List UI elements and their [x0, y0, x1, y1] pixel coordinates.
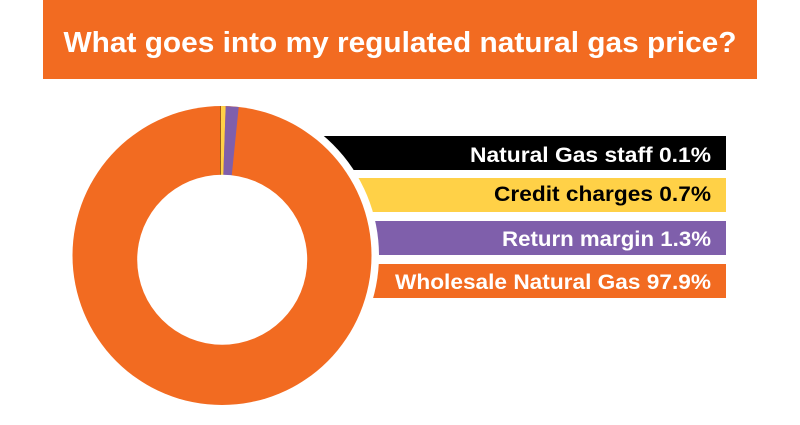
bar: natural gas staff [300, 136, 726, 170]
title banner [43, 0, 757, 79]
bar: natural gas staff: Natural Gas staff 0.1% [470, 143, 711, 167]
title: What goes into my regulated natural gas price? [64, 27, 736, 59]
legend bars [300, 136, 726, 298]
bar: wholesale natural gas: Wholesale Natural Gas 97.9% [395, 270, 711, 294]
bar: wholesale natural gas [300, 264, 726, 298]
donut chart [72, 106, 372, 405]
bar: return margin [300, 221, 726, 255]
bar: return margin: Return margin 1.3% [502, 227, 711, 251]
bar: credit charges [300, 178, 726, 212]
bar: credit charges: Credit charges 0.7% [494, 182, 711, 206]
donut hole [137, 175, 307, 345]
segment: credit charges [221, 106, 226, 176]
segment: natural gas staff [220, 106, 222, 176]
segment: wholesale natural gas [72, 106, 372, 405]
white halo masking bar ends [65, 98, 379, 412]
segment: return margin [223, 106, 239, 176]
